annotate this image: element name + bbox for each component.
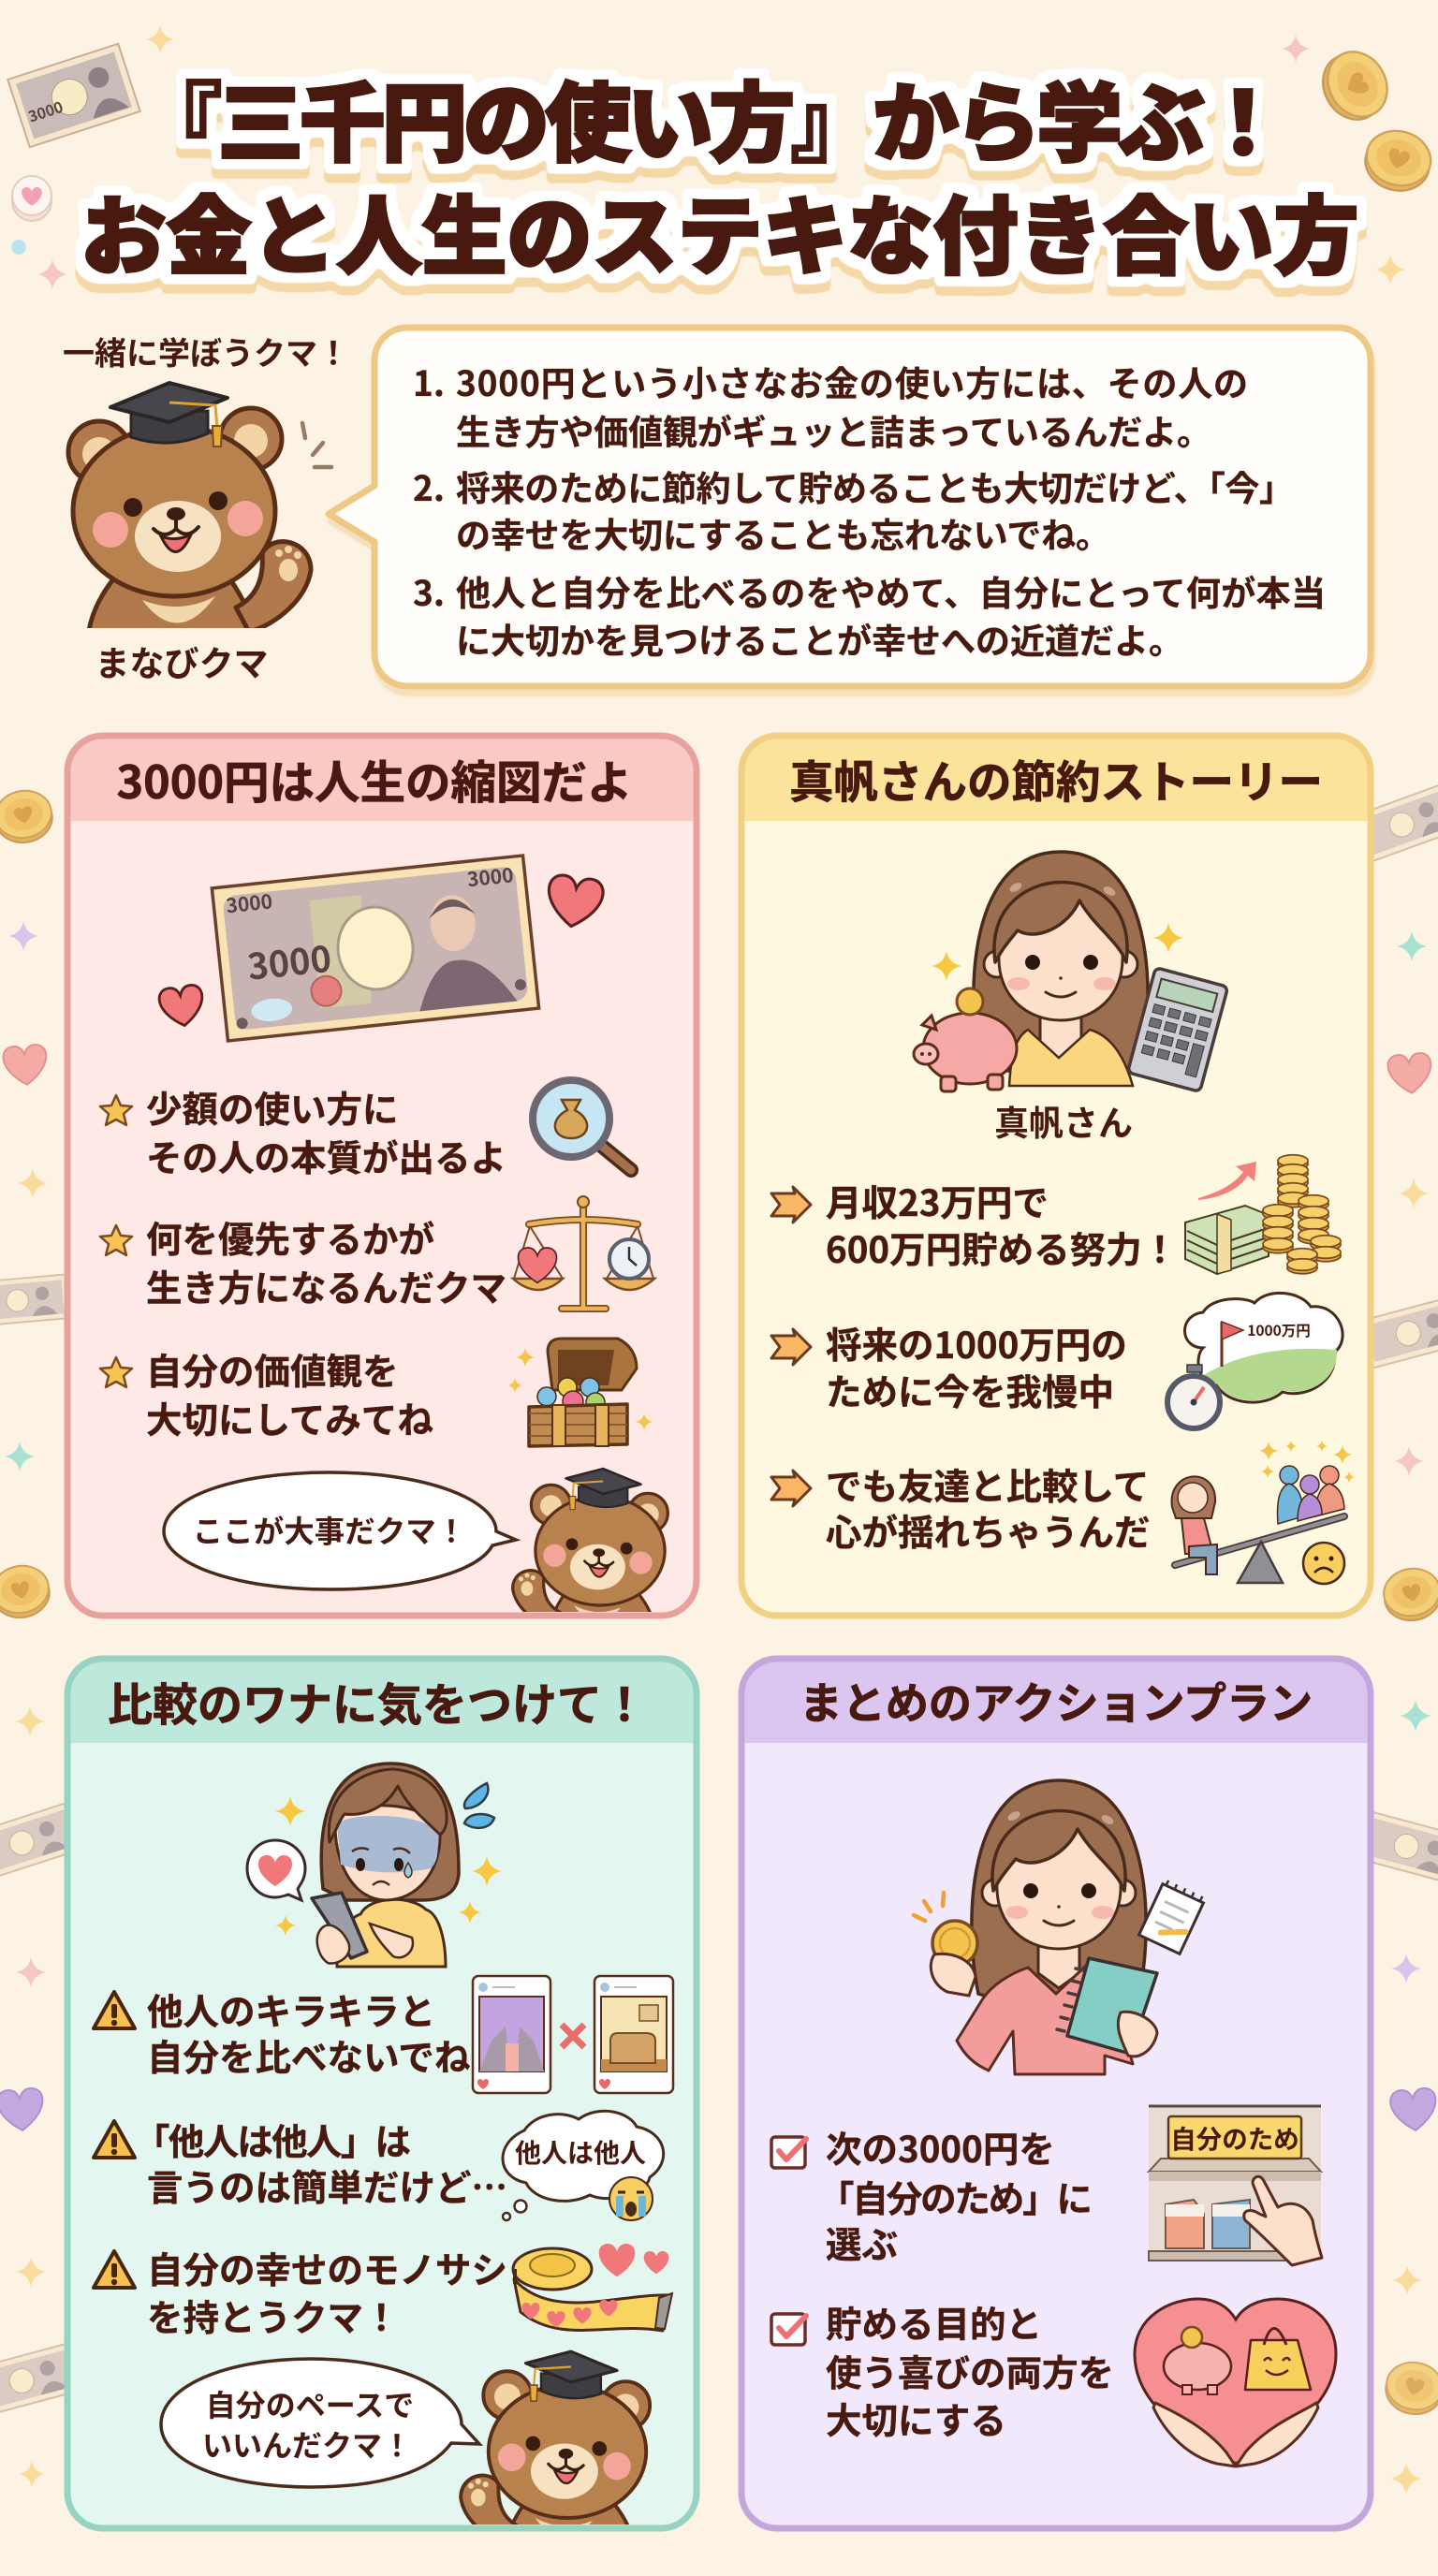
point 2: の幸せを大切にすることも忘れないでね。 — [456, 507, 1110, 558]
illustration: 3000 yen note with hearts — [158, 856, 605, 1041]
item 2 — [100, 1211, 506, 1312]
icon: banknote top left: 3000 — [25, 95, 66, 126]
item 2: 使う喜びの両方を — [826, 2345, 1114, 2397]
item 2: 何を優先するかが — [146, 1211, 434, 1264]
item 3: でも友達と比較して — [826, 1458, 1149, 1511]
panel: Maho's saving story — [741, 736, 1371, 1616]
character: Maho with piggy bank and calculator — [914, 852, 1228, 1091]
item 3 — [94, 2242, 507, 2342]
icon: banknote top left — [7, 44, 140, 147]
item 1: 月収23万円で — [826, 1175, 1049, 1227]
icon: balance scale — [513, 1196, 654, 1309]
item 1: 他人のキラキラと — [147, 1983, 435, 2036]
heart bubble — [247, 1840, 305, 1900]
point 2 — [413, 461, 1294, 558]
item 3 — [100, 1343, 433, 1444]
item 3 — [771, 1458, 1151, 1557]
memo — [1139, 1879, 1206, 1954]
bear illustration — [68, 383, 311, 643]
caption: let's learn together: 一緒に学ぼうクマ！ — [63, 328, 349, 374]
speech bubble: this is important: ここが大事だクマ！ — [193, 1507, 466, 1552]
point 3 — [413, 565, 1326, 664]
bear name: まなびクマ — [95, 636, 268, 686]
point 1: 3000円という小さなお金の使い方には、その人の — [456, 356, 1248, 406]
heading: 比較のワナに気をつけて！ — [108, 1668, 647, 1734]
item 1: 600万円貯める努力！ — [826, 1222, 1178, 1274]
icon: treasure chest — [507, 1339, 653, 1446]
icon: money stack, coins and up arrow — [1185, 1155, 1341, 1274]
item 2: 大切にする — [826, 2393, 1006, 2445]
item 1: 選ぶ — [826, 2217, 898, 2269]
icon: goal cloud and stopwatch — [1167, 1293, 1343, 1428]
icon: measuring tape with hearts — [513, 2244, 672, 2331]
item 1: 次の3000円を — [826, 2121, 1055, 2174]
title: お金と人生のステキな付き合い方 — [81, 168, 1359, 292]
heading: まとめのアクションプラン — [800, 1670, 1313, 1732]
character: bear — [459, 2349, 652, 2525]
icon: social posts compared — [473, 1976, 673, 2093]
item 1 — [94, 1983, 470, 2082]
speech bubble: your own pace: 自分のペースで — [206, 2382, 414, 2425]
title — [81, 54, 1359, 292]
point 2: 2. — [413, 461, 445, 511]
point 3: 他人と自分を比べるのをやめて、自分にとって何が本当 — [456, 565, 1326, 616]
icon: seesaw comparison — [1172, 1441, 1355, 1584]
speech bubble: this is important — [164, 1472, 516, 1589]
callout: three key points — [329, 328, 1371, 686]
icon: shelf with own-choice sign and pointing hand — [1149, 2106, 1322, 2265]
item 3: 自分の価値観を — [146, 1343, 399, 1396]
item 1: 自分を比べないでね — [147, 2029, 470, 2082]
point 3: 3. — [413, 565, 445, 616]
item 2: 「他人は他人」は — [134, 2114, 411, 2166]
illustration: 3000 yen note with hearts: 3000 — [244, 930, 333, 990]
illustration: 3000 yen note with hearts: 3000 — [225, 886, 273, 919]
item 3: 心が揺れちゃうんだ — [826, 1504, 1151, 1557]
item 1 — [771, 2121, 1093, 2269]
icon: heart with piggy bank, shopping bag and hands — [1135, 2299, 1336, 2466]
illustration: 3000 yen note with hearts: 3000 — [465, 860, 515, 893]
icon: shelf with own-choice sign and pointing hand: 自分のため — [1170, 2118, 1299, 2156]
motion lines — [302, 423, 331, 467]
character: bear — [511, 1468, 669, 1612]
notebook — [1057, 1958, 1157, 2056]
thought cloud: others are others — [503, 2111, 664, 2220]
phone — [312, 1893, 367, 1958]
point 1: 1. — [413, 356, 445, 406]
heading: 真帆さんの節約ストーリー — [789, 747, 1323, 811]
character: worried woman with phone — [247, 1764, 502, 1967]
panel: beware of the comparison trap — [67, 1659, 697, 2554]
point 1 — [413, 356, 1248, 455]
item 1 — [771, 1175, 1178, 1274]
heading: 3000円は人生の縮図だよ — [117, 746, 632, 812]
item 1: その人の本質が出るよ — [146, 1130, 506, 1182]
character: manabi bear with caption — [63, 328, 349, 686]
character: woman with coin and notebook — [914, 1780, 1206, 2074]
item 2: 生き方になるんだクマ — [146, 1260, 506, 1312]
item 3: を持とうクマ！ — [147, 2290, 400, 2342]
item 3: 大切にしてみてね — [146, 1392, 433, 1444]
piggy bank — [914, 988, 1017, 1091]
item 2: 言うのは簡単だけど… — [147, 2159, 507, 2212]
icon: goal cloud and stopwatch: 1000万円 — [1247, 1320, 1311, 1340]
title: 『三千円の使い方』から学ぶ！ — [136, 54, 1286, 180]
point 1: 生き方や価値観がギュッと詰まっているんだよ。 — [456, 404, 1211, 455]
panel: 3000 yen is a miniature of life — [67, 736, 697, 1635]
item 2: ために今を我慢中 — [826, 1364, 1114, 1416]
item 2: 将来の1000万円の — [826, 1317, 1127, 1369]
point 3: に大切かを見つけることが幸せへの近道だよ。 — [456, 613, 1183, 664]
icon: magnifier on money bag — [533, 1080, 631, 1170]
point 2: 将来のために節約して貯めることも大切だけど、「今」 — [456, 461, 1294, 511]
item 2: 貯める目的と — [826, 2296, 1042, 2349]
item 1: 少額の使い方に — [146, 1081, 399, 1134]
character name: 真帆さん — [994, 1095, 1133, 1146]
item 3: 自分の幸せのモノサシ — [147, 2242, 507, 2294]
item 2 — [94, 2114, 507, 2212]
thought cloud: others are others: 他人は他人 — [515, 2133, 646, 2171]
panel: action plan summary — [741, 1659, 1371, 2528]
speech bubble: your own pace — [161, 2359, 479, 2487]
calculator — [1127, 968, 1228, 1091]
speech bubble: your own pace: いいんだクマ！ — [202, 2422, 412, 2466]
coin — [914, 1893, 977, 1996]
item 2 — [771, 2296, 1114, 2445]
item 1: 「自分のため」に — [818, 2171, 1093, 2223]
item 1 — [100, 1081, 506, 1182]
item 2 — [771, 1317, 1127, 1416]
